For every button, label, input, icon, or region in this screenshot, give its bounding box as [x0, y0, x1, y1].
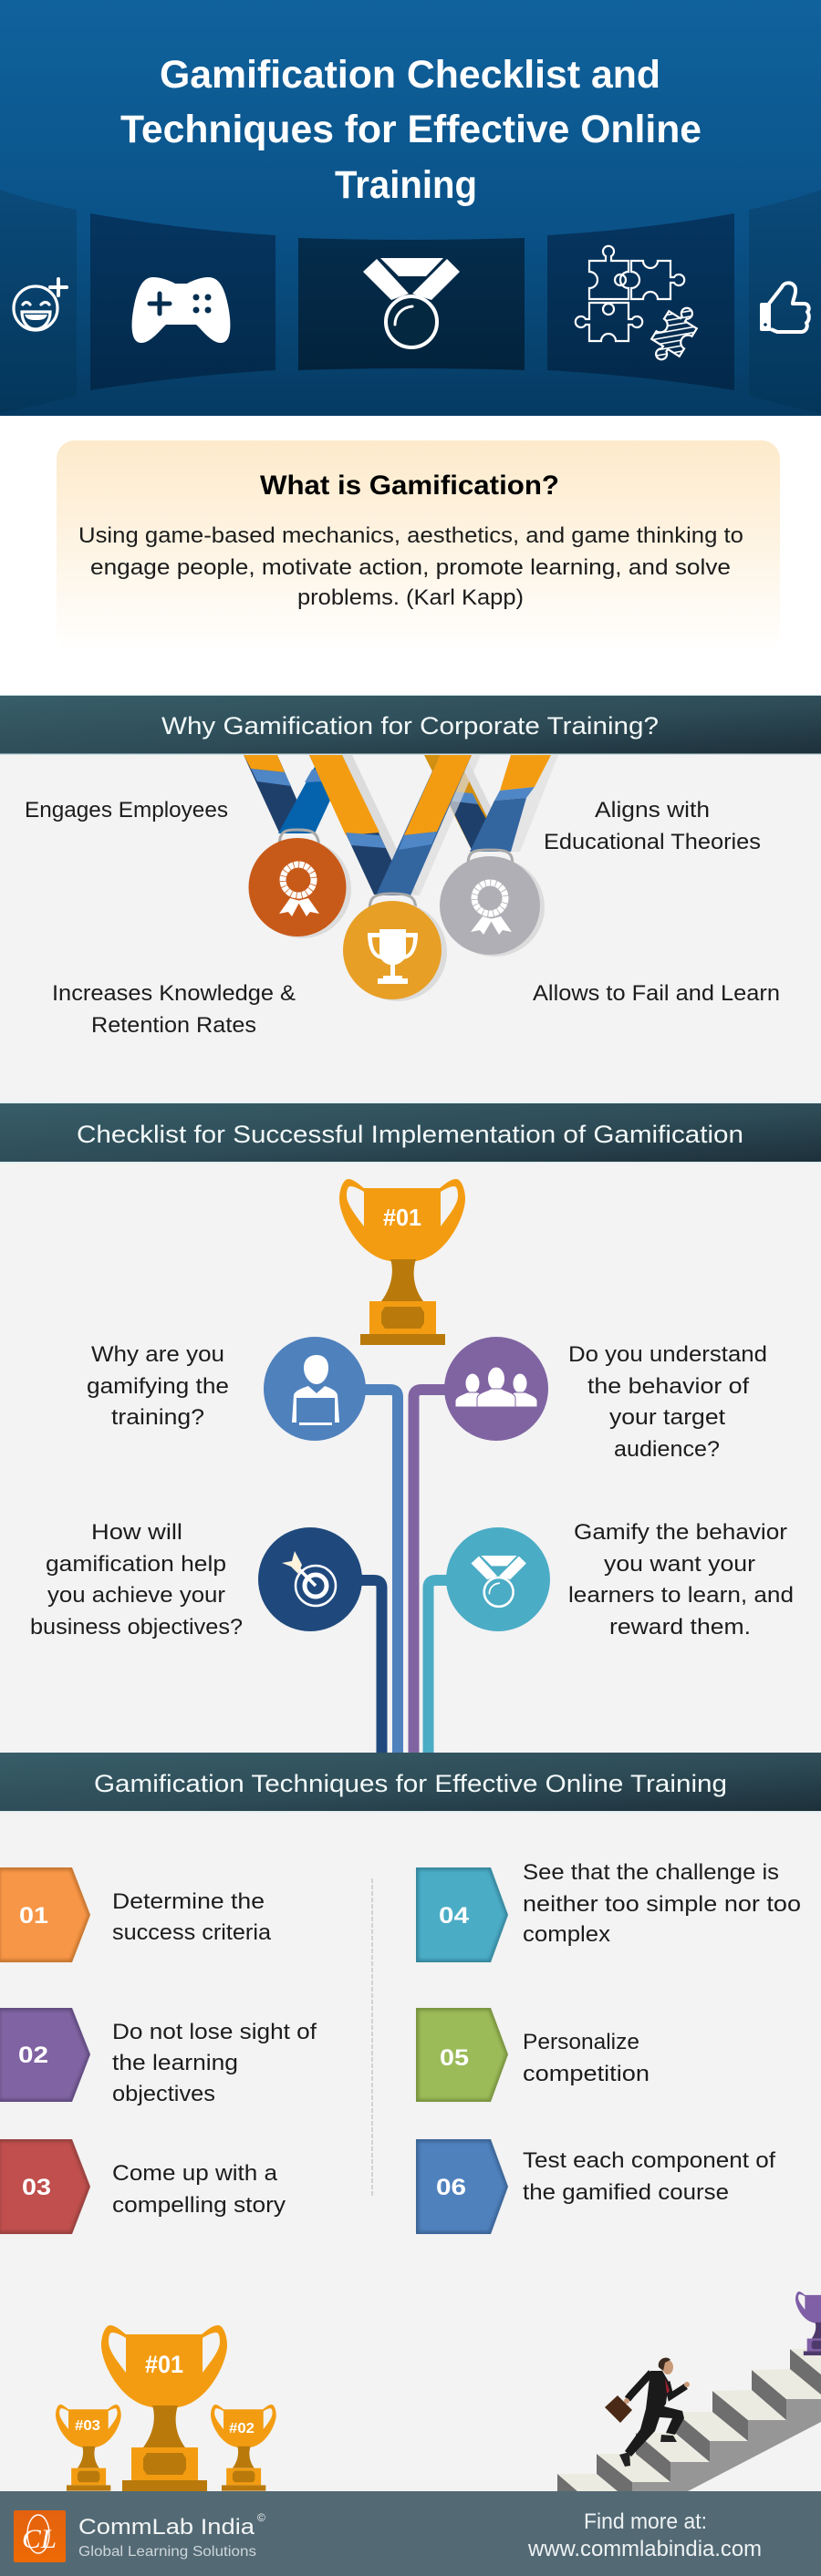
trophy: #03 [56, 2405, 121, 2491]
bronze medal straps [244, 755, 351, 833]
question: audience [568, 1342, 767, 1462]
definition text [78, 523, 743, 610]
benefit labels: Engages Employees [25, 798, 228, 822]
technique text 06 [523, 2148, 775, 2205]
icon: smiley [14, 279, 67, 330]
technique text 04: neither too simple nor too [523, 1892, 801, 1917]
medals illustration [244, 755, 558, 1001]
section band: techniques [0, 1753, 821, 1813]
technique text 02: objectives [112, 2082, 215, 2106]
definition text: problems. (Karl Kapp) [297, 585, 524, 610]
icon: game controller [132, 277, 230, 343]
brand name: CommLab India [78, 2515, 255, 2540]
technique text 01: success criteria [112, 1920, 272, 1945]
title: Training [335, 163, 477, 207]
technique text 01: Determine the [112, 1889, 265, 1914]
trophy: #02 [211, 2405, 276, 2491]
technique text 02: Do not lose sight of [112, 2020, 317, 2044]
question: reward: learners to learn, and [568, 1583, 794, 1608]
technique 06: 06 [436, 2175, 466, 2200]
technique text 04 [523, 1860, 801, 1947]
checklist item: objectives [30, 1520, 362, 1640]
staircase [557, 2349, 821, 2491]
question: why [87, 1342, 229, 1430]
question: reward: you want your [604, 1552, 755, 1577]
definition text: Using game-based mechanics, aesthetics, and game thinking to [78, 523, 743, 548]
section band: checklist [0, 1102, 821, 1164]
benefit labels [25, 798, 780, 1038]
trophy: #01 large: #01 [145, 2351, 183, 2378]
technique text 05: Personalize [523, 2030, 639, 2054]
trophy: #02: #02 [229, 2421, 255, 2436]
question: objectives: gamification help [46, 1552, 226, 1577]
title: Techniques for Effective Online [120, 108, 701, 151]
technique 05: 05 [440, 2045, 469, 2071]
website: www.commlabindia.com [527, 2537, 762, 2561]
benefit labels: Allows to Fail and Learn [533, 981, 780, 1006]
icon: person with laptop [292, 1355, 339, 1425]
benefit labels: Increases Knowledge & [52, 981, 296, 1006]
technique 02 [0, 2008, 317, 2106]
gold medal [343, 894, 447, 1001]
brand name: Global Learning Solutions [78, 2544, 256, 2560]
technique text 03: Come up with a [112, 2161, 278, 2186]
technique text 05 [523, 2030, 650, 2086]
technique text 03: compelling story [112, 2193, 286, 2218]
question: audience: the behavior of [587, 1374, 749, 1399]
businessman climbing stairs [605, 2358, 690, 2467]
question: why: training? [111, 1405, 204, 1430]
technique text 01 [112, 1889, 272, 1945]
trophy: #01 [383, 1204, 421, 1231]
purple trophy [795, 2292, 821, 2355]
question: reward: Gamify the behavior [574, 1520, 787, 1545]
technique 03: 03 [22, 2175, 51, 2200]
question: audience: Do you understand [568, 1342, 767, 1367]
technique 02: 02 [18, 2043, 48, 2068]
technique text 03 [112, 2161, 286, 2218]
section band: why gamification: Why Gamification for Corporate Training? [161, 712, 659, 740]
divider [371, 1878, 373, 2196]
panel: what is gamification [57, 440, 780, 652]
trophy [339, 1179, 465, 1345]
technique text 04: See that the challenge is [523, 1860, 779, 1885]
section band: techniques: Gamification Techniques for Effective Online Training [94, 1770, 727, 1797]
icon: target with arrow [282, 1551, 336, 1606]
benefit labels: Educational Theories [544, 830, 761, 854]
technique text 06: the gamified course [523, 2180, 729, 2205]
technique 01: 01 [19, 1903, 48, 1929]
footer [0, 2491, 821, 2576]
heading: what is gamification: What is Gamification? [260, 471, 559, 501]
bronze medal [248, 830, 351, 938]
question: audience: audience? [614, 1437, 720, 1462]
icon: medal [471, 1556, 526, 1607]
panel: header [0, 0, 821, 416]
benefit labels: Retention Rates [91, 1013, 256, 1038]
question: objectives: How will [91, 1520, 182, 1545]
checklist item: audience [444, 1337, 767, 1462]
question: reward: reward them. [609, 1615, 751, 1640]
silver medal straps [424, 755, 558, 852]
question: objectives: you achieve your [47, 1583, 225, 1608]
gold medal straps [309, 755, 481, 895]
technique 03 [0, 2139, 286, 2234]
question: why: Why are you [91, 1342, 224, 1367]
icon: medal [363, 258, 460, 347]
definition text: engage people, motivate action, promote learning, and solve [90, 555, 731, 580]
silver medal [440, 850, 545, 957]
question: objectives: business objectives? [30, 1615, 243, 1640]
technique text 06: Test each component of [523, 2148, 775, 2173]
technique 05 [416, 2008, 650, 2102]
website: Find more at: [584, 2509, 707, 2534]
trophy: #03: #03 [75, 2418, 100, 2434]
section band: checklist: Checklist for Successful Implementation of Gamification [77, 1121, 743, 1148]
title [120, 53, 701, 207]
technique text 02: the learning [112, 2051, 238, 2075]
connector lines [356, 1390, 452, 1753]
technique 06 [416, 2139, 775, 2234]
technique text 04: complex [523, 1922, 610, 1947]
website [527, 2509, 762, 2561]
technique 01 [0, 1867, 272, 1962]
technique text 02 [112, 2020, 317, 2106]
icon: three people [455, 1367, 537, 1407]
section band: why gamification [0, 695, 821, 755]
question: reward [568, 1520, 794, 1640]
title: Gamification Checklist and [160, 53, 660, 97]
trophy: #01 large [101, 2325, 227, 2491]
benefit labels: Aligns with [595, 798, 710, 822]
checklist item: reward [446, 1520, 794, 1640]
icon: puzzle pieces [576, 246, 703, 367]
question: audience: your target [609, 1405, 725, 1430]
question: why: gamifying the [87, 1374, 229, 1399]
technique 04 [416, 1860, 801, 1962]
checklist item: why [87, 1337, 366, 1441]
technique 04: 04 [439, 1903, 469, 1929]
technique text 05: competition [523, 2062, 650, 2086]
briefcase [605, 2395, 632, 2423]
brand name: © [257, 2511, 265, 2524]
question: objectives [30, 1520, 243, 1640]
logo: CL [22, 2524, 57, 2554]
brand name [78, 2511, 265, 2560]
logo [14, 2510, 66, 2562]
icon: thumbs up [760, 283, 809, 332]
